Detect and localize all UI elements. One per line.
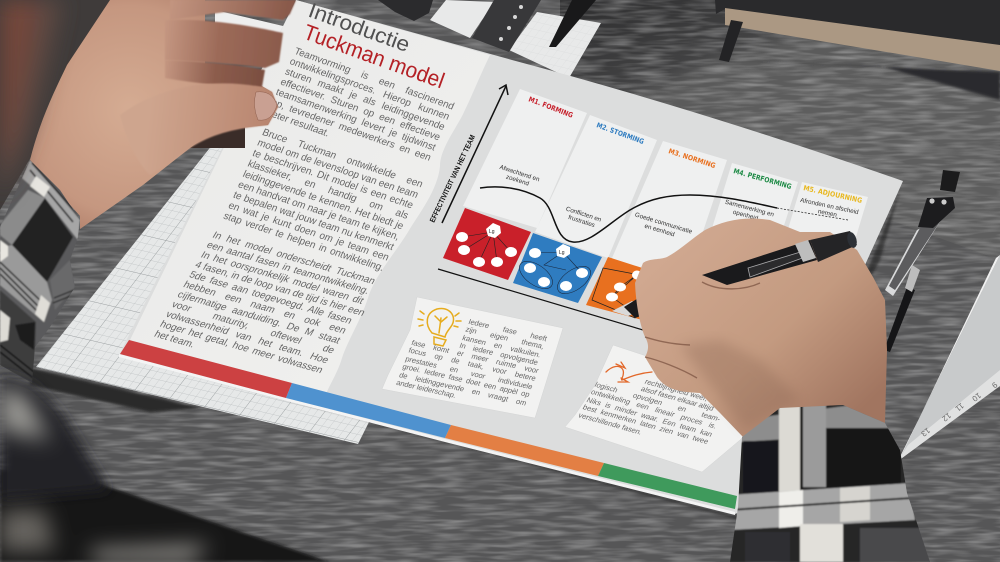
pen on desk	[549, 0, 596, 47]
thumb	[120, 83, 278, 175]
person: blurred body	[0, 372, 330, 562]
color strip: green	[598, 463, 737, 509]
phase descriptions: Samenwerking en	[724, 199, 775, 219]
text: paragraph 1: ontwikkelingsproces. Hierop kunnen	[288, 56, 451, 123]
thumb nail	[254, 92, 277, 120]
phase descriptions: en eenheid	[644, 223, 676, 239]
top finger	[170, 0, 296, 20]
heading: Tuckman model: Tuckman model	[300, 19, 448, 93]
column: M3 norming	[612, 141, 727, 300]
panel: intro text sheet	[130, 0, 490, 394]
text: paragraph 3: 5de fase aan toegevoegd. Alle fasen	[187, 270, 354, 327]
text: phases card bottom: focus op de taak, voor betere	[407, 346, 537, 383]
phase descriptions: Afronden en afscheid	[799, 197, 860, 216]
person: head blurred	[0, 0, 62, 195]
block: red forming team	[443, 208, 531, 280]
pen tip	[612, 297, 652, 318]
text: paragraph 1: teamsamenwerking levert je tijdwinst	[274, 87, 437, 153]
triangle ruler: 9	[990, 380, 999, 390]
column: M5 adjourning	[770, 182, 868, 290]
block: blue storming team	[513, 233, 602, 303]
icon: orange squiggle arrow	[606, 362, 652, 382]
block: orange norming team	[586, 257, 680, 322]
x axis line	[438, 269, 660, 335]
text: nonlinear card bottom	[577, 380, 722, 446]
phase descriptions: nemen	[817, 208, 838, 219]
text: nonlinear card top: rechtlijnigheid weer,	[643, 377, 710, 403]
text: paragraph 3: het team.	[152, 329, 197, 350]
right hand	[635, 218, 887, 437]
black ruler	[472, 0, 541, 52]
shadow under left thumb	[187, 125, 245, 148]
third finger	[165, 60, 265, 87]
text: paragraph 3: volwassenheid van het team. Hoe	[164, 309, 331, 366]
cuff band	[22, 160, 80, 240]
column: M2 storming	[535, 115, 657, 258]
curve: team effectiveness	[480, 187, 848, 242]
text: paragraph 3: In het oorspronkelijk model waren dit	[199, 250, 366, 307]
brochure shadow	[122, 190, 900, 520]
triangle ruler: 12	[940, 411, 953, 424]
text: paragraph 2: een handvat om naar je team te kijken,	[236, 179, 401, 243]
color strip: blue	[286, 383, 451, 438]
note paper top	[430, 0, 601, 78]
paper behind fingers	[215, 10, 300, 40]
dark wedge under desk edge	[0, 470, 330, 562]
text: paragraph 2: te bepalen wat jouw team nu kenmerkt	[231, 190, 396, 253]
heading: Introductie: Introductie	[305, 0, 413, 57]
gray block	[0, 190, 45, 245]
phase descriptions: frustraties	[567, 214, 596, 229]
pen body	[702, 231, 858, 285]
icon: lightbulb	[418, 308, 461, 346]
chart: Tuckman phases	[428, 85, 868, 335]
text: paragraph 2: Bruce Tuckman ontwikkelde een	[260, 127, 425, 190]
phase descriptions	[499, 164, 860, 239]
shadow under graph paper	[30, 368, 200, 412]
text: paragraph 3: 4 fasen, in de loop van de tijd is hier een	[193, 260, 367, 319]
triangle ruler: 11	[953, 401, 966, 413]
lower band	[0, 245, 52, 322]
text: paragraph 1: sturen maakt je als leidinggevende	[283, 66, 447, 133]
text: paragraph 1: Teamvorming is een fascinerend	[292, 46, 456, 113]
text: phases card top: Iedere fase heeft	[467, 317, 548, 343]
brochure sheet	[119, 0, 903, 515]
text: paragraph 3: voor maturity, oftewel de	[169, 299, 336, 356]
text: paragraph 1: effectiever. Sturen op een effectieve	[279, 77, 442, 143]
text: nonlinear card bottom: ontwikkeling een lineair proces is.	[589, 388, 718, 431]
text: paragraph 1: beter resultaat.	[265, 107, 331, 140]
triangle ruler: 10	[970, 391, 983, 404]
text: nonlinear card bottom: best kenmerken laten zien van twee	[581, 403, 710, 446]
text: nonlinear card bottom: Niks is minder waar. Een team kan	[585, 395, 714, 438]
text: paragraph 2: model om de levensloop van een team	[255, 137, 420, 201]
graph paper	[36, 120, 480, 444]
header: M1: M1. FORMING	[527, 95, 574, 120]
fold	[50, 260, 75, 310]
phase descriptions: openheid	[732, 209, 759, 222]
text: paragraph 1	[265, 46, 456, 164]
text: paragraph 2: en wat je kunt doen om je team een	[226, 200, 391, 264]
text: nonlinear card bottom: logisch opvolgen en team-	[593, 380, 722, 423]
dark zone beside hand	[0, 0, 115, 210]
text: paragraph 2: leidinggevende te kennen. Het biedt je	[241, 169, 405, 232]
left sleeve	[0, 160, 80, 383]
marker on desk	[378, 0, 433, 21]
phase descriptions: zoekend	[505, 174, 530, 188]
card: phases	[382, 297, 563, 418]
second finger	[165, 20, 283, 68]
y axis arrow	[442, 85, 508, 223]
text: nonlinear card bottom: verschillende fasen.	[577, 410, 644, 436]
header: M4: M4. PERFORMING	[732, 167, 793, 191]
y axis label: EFFECTIVITEIT VAN HET TEAM	[428, 133, 477, 224]
block: blue storming team: Lg	[559, 250, 565, 256]
text: paragraph 3: In het model onderscheidt Tuckman	[210, 230, 377, 287]
triangle ruler: 13	[919, 426, 932, 439]
text: phases card top: kansen en valkuilen.	[461, 333, 542, 359]
header: M5: M5. ADJOURNING	[803, 184, 863, 205]
text: phases card top: In iedere opvolgende	[458, 341, 539, 367]
text: paragraph 3: een aantal fasen in teamontwikkeling.	[204, 240, 371, 297]
left hand	[30, 0, 296, 229]
text: paragraph 3: hebben een naam en ook een	[181, 280, 348, 336]
color strip: orange	[445, 425, 604, 476]
text: phases card top: zijn eigen thema,	[464, 325, 545, 351]
block: red forming team: Lg	[489, 229, 495, 235]
right sleeve	[725, 400, 935, 562]
lower sleeve	[0, 290, 36, 384]
text: paragraph 3	[152, 230, 377, 376]
text: phases card bottom: fase komt er meer ruimte voor	[410, 338, 540, 375]
text: phases card bottom: de leidinggevende en vraagt om	[398, 370, 528, 407]
dark block	[12, 198, 73, 282]
column: M4 performing	[690, 163, 798, 300]
text: phases card bottom	[395, 338, 540, 407]
text: phases card bottom: groei. Iedere fase doet een appèl op	[401, 362, 531, 399]
finger creases	[645, 282, 760, 378]
text: paragraph 2: stap verder te helpen in ontwikkeling.	[221, 211, 386, 274]
compass	[884, 170, 960, 352]
header: M3: M3. NORMING	[667, 147, 717, 170]
text: nonlinear card top: alsof fasen elkaar altijd	[639, 385, 716, 413]
phase descriptions: Goede communicatie	[634, 212, 693, 236]
text: phases card bottom: ander leiderschap.	[395, 378, 458, 400]
text: paragraph 3: hoger het getal, hoe meer volwassen	[158, 319, 325, 376]
text: paragraph 2	[221, 127, 425, 274]
text: paragraph 2: te beschrijven. Dit model is een echte	[250, 148, 415, 211]
text: paragraph 1: op, tevredener medewerkers en een	[269, 97, 433, 164]
card: nonlinear	[565, 345, 780, 472]
color strip: red	[120, 340, 292, 398]
text: phases card top	[458, 317, 548, 367]
phase descriptions: Afwachtend en	[499, 164, 541, 183]
column: M1 forming	[463, 89, 587, 228]
phase descriptions: Conflicten en	[565, 206, 602, 224]
text: paragraph 2: klassieker, en handig om als	[246, 158, 410, 222]
header: M2: M2. STORMING	[595, 121, 645, 146]
triangle ruler	[898, 255, 1000, 461]
text: phases card bottom: prestaties en voor individuele	[404, 354, 534, 391]
text: paragraph 3: cijfermatige aanduiding. De M staat	[175, 289, 342, 346]
notebook	[715, 0, 1000, 100]
